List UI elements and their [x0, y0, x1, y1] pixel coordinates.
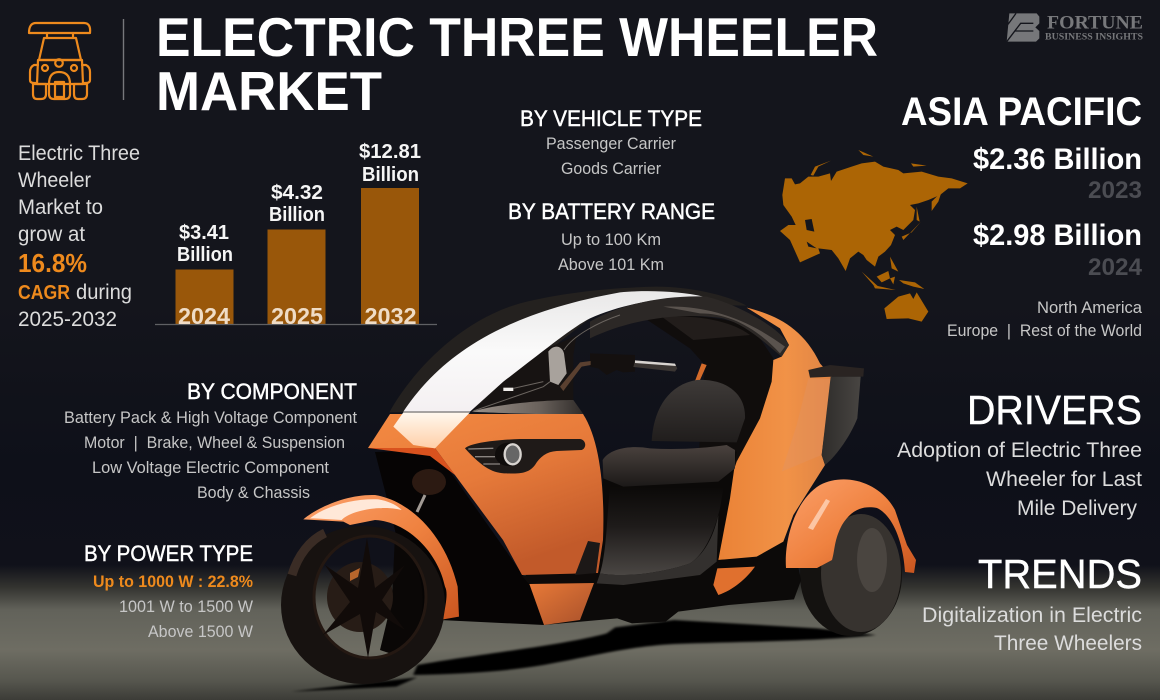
roof band highlight: [663, 307, 785, 353]
segment: by power type: Up to 1000 W : 22.8%: [93, 573, 253, 591]
black nose underside: [375, 450, 544, 640]
door shard: [575, 541, 600, 575]
segment: by battery range: Above 101 Km: [558, 255, 664, 274]
segment: by vehicle type: Goods Carrier: [561, 159, 661, 178]
front fender: [303, 495, 459, 619]
regional data: Asia Pacific: 2024: [1088, 254, 1143, 281]
chassis: [523, 540, 801, 625]
logo: Fortune Business Insights: [1007, 12, 1143, 42]
segment: by power type: [84, 541, 253, 641]
bar chart: market size: 2032: [364, 303, 416, 329]
regional data: Asia Pacific: ASIA PACIFIC: [901, 90, 1142, 134]
bar chart: market size: Billion: [269, 204, 325, 226]
text block: drivers: Wheeler for Last: [986, 468, 1142, 491]
segment: by component: BY COMPONENT: [187, 379, 357, 404]
bar chart: market size: $4.32: [271, 182, 323, 204]
text block: drivers: Adoption of Electric Three: [897, 439, 1142, 462]
lower rear panel: [713, 567, 755, 595]
segment: by power type: Above 1500 W: [148, 622, 253, 641]
windshield interior: [472, 320, 613, 412]
segment: by vehicle type: BY VEHICLE TYPE: [520, 106, 702, 131]
text block: CAGR growth statement: 16.8%: [18, 248, 87, 278]
interior rear panel: [645, 316, 773, 485]
roof outer edge: [389, 287, 747, 415]
text block: CAGR growth statement: Electric Three: [18, 142, 140, 165]
bar chart: market size: Billion: [177, 244, 233, 266]
seat back: [652, 380, 745, 442]
segment: by component: [64, 379, 357, 502]
text block: CAGR growth statement: Market to: [18, 196, 103, 219]
text block: CAGR growth statement: 2025-2032: [18, 308, 117, 331]
text block: CAGR growth statement: CAGR: [18, 282, 70, 304]
segment: by component: Motor | Brake, Wheel & Suspension: [84, 433, 345, 452]
logo: Fortune Business Insights: FORTUNE: [1047, 12, 1143, 34]
vehicle: orange electric three wheeler: [281, 287, 916, 692]
segment: by vehicle type: Passenger Carrier: [546, 134, 676, 153]
regional data: Asia Pacific: $2.36 Billion: [973, 143, 1142, 176]
text block: trends: TRENDS: [978, 551, 1142, 597]
segment: by battery range: BY BATTERY RANGE: [508, 199, 715, 224]
nose glow: [368, 448, 455, 475]
regional data: Asia Pacific: North America: [1037, 298, 1143, 317]
front wheel: [281, 526, 445, 684]
title: ELECTRIC THREE WHEELER: [156, 6, 878, 68]
divider: [122, 19, 124, 100]
roof band: [590, 296, 789, 357]
rear box lid: [808, 365, 864, 378]
icon: electric three wheeler: [29, 23, 90, 99]
segment: by component: Battery Pack & High Voltage Component: [64, 408, 357, 427]
handlebar: [590, 353, 677, 375]
windscreen reflection and headlight: [393, 315, 620, 474]
headlight housing: [465, 439, 585, 474]
dull rear patch: [782, 378, 831, 472]
bar chart: market size: 2025: [271, 303, 323, 329]
rear body lower band: [717, 558, 760, 568]
body band: [522, 573, 598, 584]
title: [156, 6, 878, 122]
segment: by vehicle type: [520, 106, 702, 178]
rear body: [590, 296, 864, 595]
step well: [600, 487, 723, 575]
door sill: [597, 515, 718, 585]
text block: CAGR growth statement: grow at: [18, 223, 85, 246]
regional data: Asia Pacific: $2.98 Billion: [973, 219, 1142, 252]
seat cushion: [603, 445, 735, 487]
segment: by battery range: Up to 100 Km: [561, 230, 661, 249]
text block: trends: Digitalization in Electric: [922, 604, 1142, 627]
bar chart: market size: $3.41: [179, 222, 229, 244]
logo: Fortune Business Insights: BUSINESS INSIGHTS: [1045, 32, 1143, 42]
segment: by power type: 1001 W to 1500 W: [119, 597, 253, 616]
lower nose tip: [529, 583, 594, 625]
text block: CAGR growth statement: during: [76, 281, 132, 304]
front fork: [412, 469, 446, 512]
segment: by power type: BY POWER TYPE: [84, 541, 253, 566]
ground shadow: [291, 620, 876, 692]
text block: trends: [922, 551, 1142, 655]
text block: trends: Three Wheelers: [994, 632, 1142, 655]
bar chart: market size: 2024: [178, 303, 230, 329]
title: MARKET: [156, 60, 382, 122]
white windscreen: [403, 291, 703, 412]
segment: by component: Low Voltage Electric Component: [92, 458, 329, 477]
regional data: Asia Pacific: Europe | Rest of the World: [947, 321, 1142, 340]
rear box: [822, 377, 861, 465]
text block: CAGR growth statement: Wheeler: [18, 169, 91, 192]
under seat black: [597, 452, 737, 578]
text block: drivers: Mile Delivery: [1017, 497, 1137, 520]
text block: drivers: DRIVERS: [967, 387, 1142, 433]
segment: by battery range: [508, 199, 715, 274]
mirror and wires: [473, 315, 620, 411]
text block: CAGR growth statement: [18, 142, 140, 331]
pillar trim: [472, 400, 584, 415]
map: Asia Pacific: [780, 150, 968, 322]
text block: drivers: [897, 387, 1142, 520]
regional data: Asia Pacific: [901, 90, 1143, 340]
bar chart: market size: [155, 141, 437, 329]
bar chart: market size: Billion: [362, 164, 419, 186]
front body: [368, 414, 603, 575]
bar chart: market size: $12.81: [359, 141, 421, 163]
rear fender: [786, 479, 916, 573]
segment: by component: Body & Chassis: [197, 483, 310, 502]
rear wheel: [800, 514, 902, 636]
regional data: Asia Pacific: 2023: [1088, 177, 1142, 204]
